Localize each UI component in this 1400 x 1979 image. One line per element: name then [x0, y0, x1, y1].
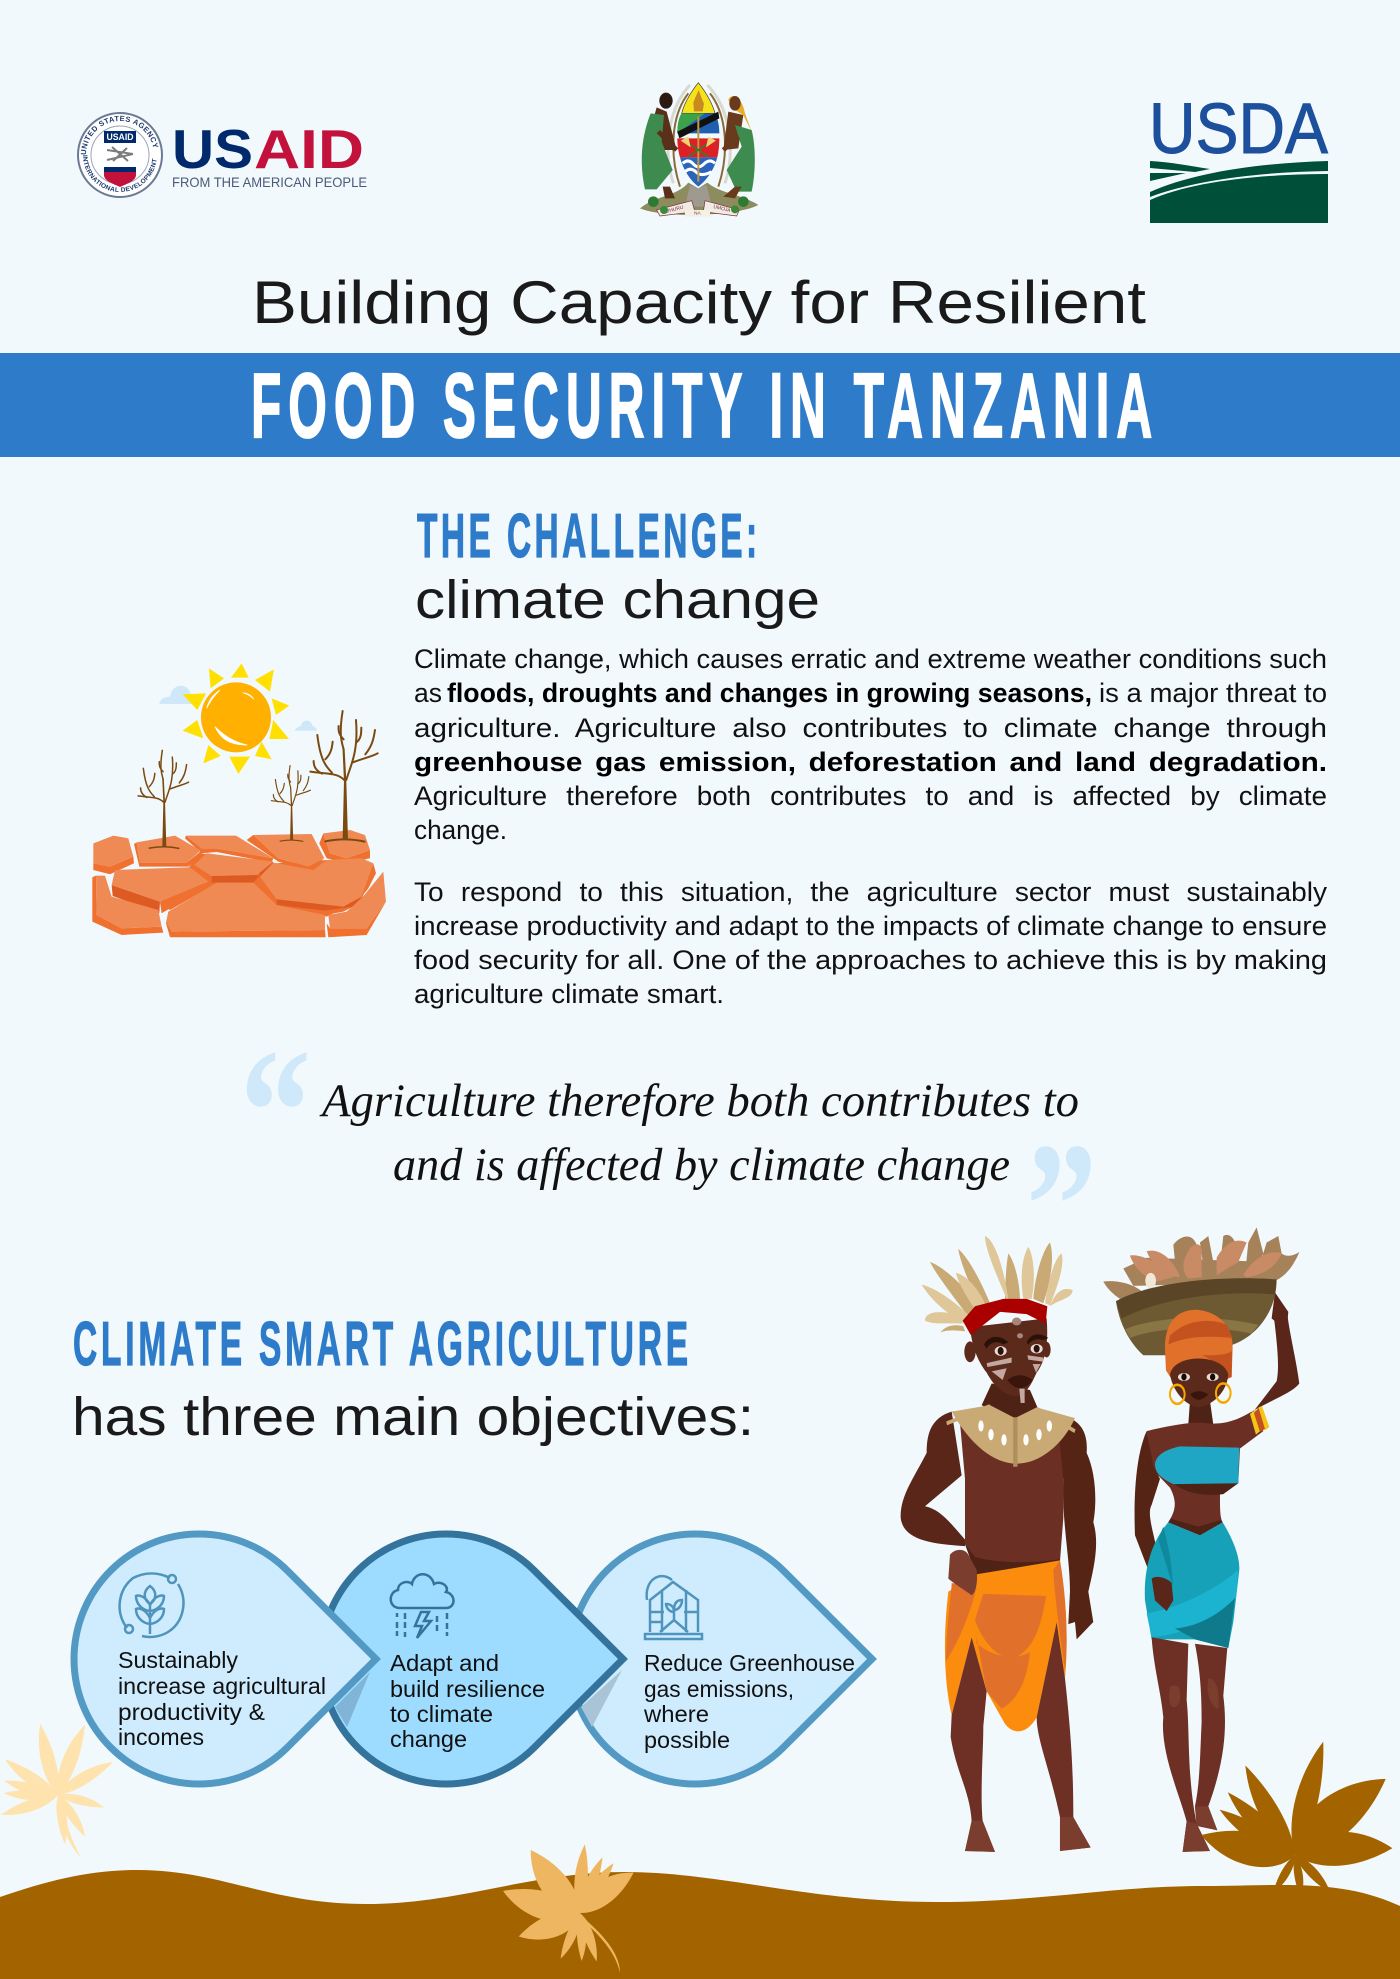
text: objective 2: change: [390, 1726, 467, 1752]
USAID seal: [77, 112, 163, 198]
text: objective 1: Sustainably: [118, 1647, 238, 1673]
torso: [960, 1423, 1077, 1576]
text: objective 3: where: [643, 1701, 709, 1727]
heading: the challenge: THE CHALLENGE:: [417, 501, 757, 571]
clouds: [159, 686, 317, 731]
woman: [1103, 1227, 1299, 1852]
tip shadow: [335, 1672, 370, 1727]
text block: climate change explanation: is a major threat to: [1099, 678, 1327, 708]
title banner: [0, 353, 1400, 457]
basket of yams: [1103, 1227, 1299, 1355]
left figure: [642, 93, 677, 198]
upper body: [1147, 1412, 1263, 1535]
feather headdress: [922, 1236, 1073, 1332]
USAID wordmark: FROM THE AMERICAN PEOPLE: [172, 174, 367, 190]
icon: storm cloud: [391, 1574, 454, 1638]
objective 1: sustainably increase productivity: [74, 1534, 376, 1784]
text block: climate change explanation: [414, 644, 1327, 845]
title banner: FOOD SECURITY IN TANZANIA: [251, 354, 1152, 457]
USAID wordmark: AID: [254, 118, 364, 180]
turban: [1165, 1310, 1233, 1379]
text: objective 1: productivity &: [118, 1699, 265, 1725]
skirt: [1145, 1519, 1239, 1648]
text: objective 2: build resilience: [390, 1676, 545, 1702]
head: [963, 1299, 1051, 1403]
plant: pale left: [0, 1722, 115, 1858]
text block: climate change explanation: floods, droughts and changes in growing seasons,: [447, 678, 1092, 708]
text: objective 2: [390, 1650, 545, 1752]
logo: USDA: [1149, 90, 1329, 223]
right figure: [723, 96, 755, 198]
man: [901, 1236, 1096, 1852]
shield: [677, 83, 719, 187]
hand on hip: [948, 1550, 977, 1595]
text block: climate change explanation: Agriculture therefore both contributes to and is affected by climate: [414, 781, 1327, 811]
head: [1170, 1359, 1228, 1407]
text: objective 2: Adapt and: [390, 1650, 499, 1676]
closing quote mark: ”: [1026, 1106, 1097, 1305]
collar necklace: [947, 1405, 1075, 1467]
USAID wordmark: US: [172, 118, 253, 180]
mountain base: [640, 183, 758, 217]
heading: climate smart agriculture: [72, 1309, 754, 1447]
right arm: [1057, 1414, 1096, 1639]
mountain base: NA: [694, 211, 701, 216]
text block: response: increase productivity and adapt to the impacts of climate change to ensure: [414, 911, 1327, 941]
illustration: drought land: [92, 663, 386, 937]
back arm: [901, 1412, 965, 1546]
legs: [1152, 1637, 1227, 1852]
left arm: [1135, 1431, 1172, 1611]
heading: climate smart agriculture: CLIMATE SMART AGRICULTURE: [73, 1309, 688, 1379]
illustration: man and woman: [901, 1227, 1299, 1852]
sun: [183, 663, 289, 774]
heading: climate smart agriculture: has three main objectives:: [72, 1387, 754, 1447]
icon: wheat in orbit: [120, 1574, 183, 1637]
text block: response: food security for all. One of the approaches to achieve this is by making: [414, 945, 1327, 975]
hand: [1152, 1577, 1173, 1611]
title: Building Capacity for Resilient: Building Capacity for Resilient: [252, 269, 1146, 336]
bracelet: [1250, 1410, 1263, 1435]
USDA wordmark: USDA: [1149, 90, 1329, 169]
USAID seal: USAID: [106, 132, 134, 142]
legs: [951, 1622, 1091, 1852]
text: objective 3: [643, 1650, 855, 1753]
plant: brown right: [1197, 1738, 1396, 1899]
text: objective 1: incomes: [118, 1724, 204, 1750]
cracked earth: [92, 830, 386, 937]
opening quote mark: “: [240, 1012, 311, 1211]
bare trees: [138, 711, 378, 848]
heading: the challenge: [415, 501, 820, 630]
USAID seal: UNITED STATES AGENCY: [80, 116, 158, 154]
pull quote: [240, 1012, 1097, 1305]
objective 2: adapt and build resilience: [321, 1534, 623, 1784]
tip shadow: [581, 1670, 622, 1727]
earrings: [1170, 1383, 1231, 1404]
red headband: [963, 1299, 1047, 1335]
text: objective 3: gas emissions,: [644, 1676, 794, 1702]
text block: response: To respond to this situation, the agriculture sector must sustainably: [414, 877, 1328, 907]
plant: middle: [499, 1843, 639, 1973]
text block: climate change explanation: Climate change, which causes erratic and extreme weather conditions such: [414, 644, 1327, 674]
logo: USAID: [77, 112, 367, 198]
neck: [982, 1383, 1038, 1425]
icon: greenhouse: [645, 1576, 702, 1639]
text: objective 1: [118, 1647, 326, 1750]
objective 3: reduce greenhouse gas: [570, 1534, 872, 1784]
raised arm: [1252, 1312, 1299, 1412]
neck: [1188, 1401, 1213, 1425]
ground: [0, 1870, 1400, 1979]
pull quote: Agriculture therefore both contributes to: [319, 1075, 1079, 1127]
text block: climate change explanation: as: [414, 678, 442, 708]
text block: response: agriculture climate smart.: [414, 979, 724, 1009]
text block: climate change explanation: agriculture. Agriculture also contributes to climate change through: [414, 713, 1327, 743]
text: objective 2: to climate: [390, 1701, 493, 1727]
mountain base: UMOJA: [713, 204, 732, 214]
text: objective 3: Reduce Greenhouse: [644, 1650, 855, 1676]
text block: climate change explanation: change.: [414, 815, 507, 845]
logo: Tanzania coat of arms: [640, 83, 758, 217]
text: objective 3: possible: [644, 1727, 730, 1753]
sarong: [945, 1560, 1067, 1731]
text block: response: [414, 877, 1328, 1009]
USAID wordmark: [172, 118, 367, 190]
mountain base: UHURU: [665, 204, 685, 215]
text: objective 1: increase agricultural: [118, 1673, 326, 1699]
bandeau: [1155, 1446, 1239, 1484]
text block: climate change explanation: greenhouse gas emission, deforestation and land degradation.: [414, 747, 1327, 777]
pull quote: and is affected by climate change: [393, 1139, 1010, 1191]
heading: the challenge: climate change: [415, 570, 820, 630]
USAID seal: INTERNATIONAL DEVELOPMENT: [83, 155, 156, 192]
USDA landscape: [1150, 161, 1328, 223]
